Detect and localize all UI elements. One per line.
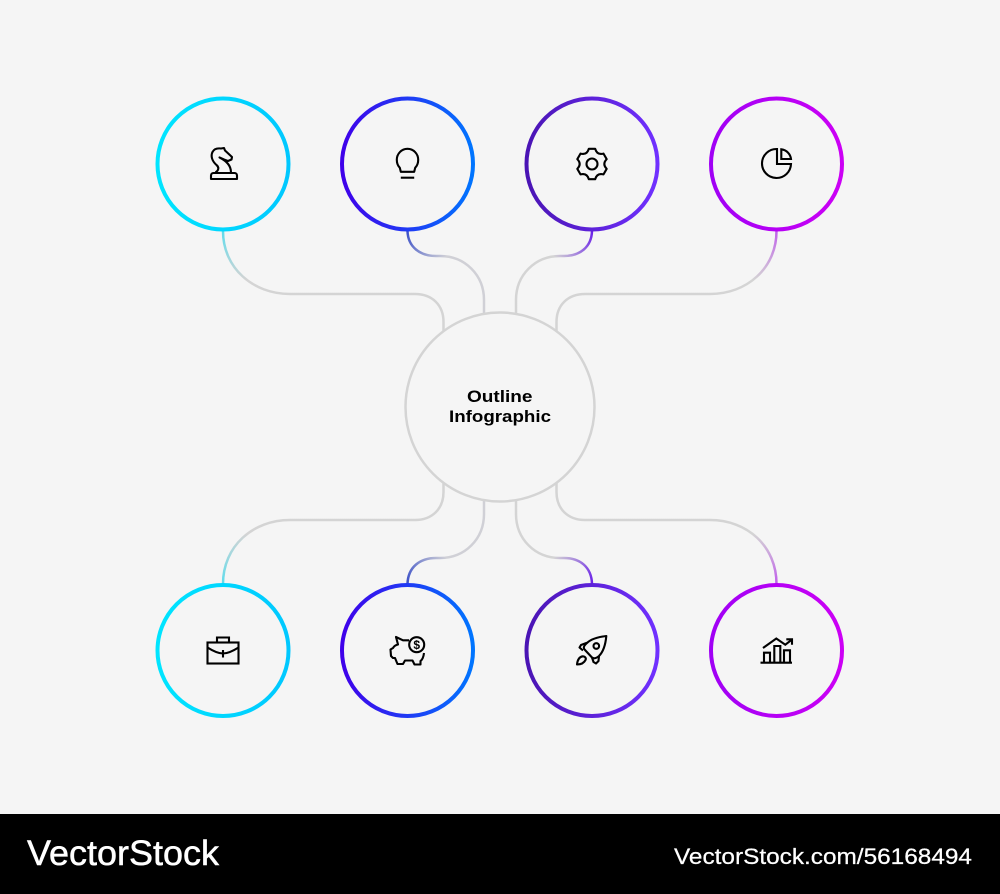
footer logo: VectorStock <box>27 834 220 873</box>
node: growth <box>711 585 842 716</box>
central node <box>406 312 594 502</box>
icon: bar chart with arrow <box>760 638 792 663</box>
connector: bottom 2 <box>408 500 484 584</box>
icon: pie chart <box>762 149 791 178</box>
connector: bottom 1 <box>223 482 444 584</box>
node: settings <box>526 98 658 230</box>
icon: briefcase <box>208 638 238 664</box>
node: savings <box>342 585 473 716</box>
icon: rocket <box>577 636 606 664</box>
connector: top 2 <box>408 231 484 314</box>
connector: top 3 <box>516 231 592 314</box>
connector: top 1 <box>223 231 444 332</box>
node: business <box>158 585 288 716</box>
node: idea <box>342 98 473 230</box>
connector: bottom 4 <box>556 482 776 584</box>
node: strategy <box>158 98 288 230</box>
central title: Infographic <box>449 408 551 426</box>
icon: light bulb <box>397 149 418 178</box>
central title: Outline <box>467 388 532 406</box>
icon: piggy bank with coin: $ <box>413 638 420 652</box>
footer url: VectorStock.com/56168494 <box>674 844 972 869</box>
node: chart <box>711 98 842 230</box>
node: launch <box>526 585 658 716</box>
footer bar <box>0 814 1000 894</box>
connector: top 4 <box>556 231 776 332</box>
connector: bottom 3 <box>516 500 592 584</box>
icon: gear <box>577 149 607 179</box>
icon: chess knight <box>211 148 237 179</box>
connectors <box>223 231 776 584</box>
